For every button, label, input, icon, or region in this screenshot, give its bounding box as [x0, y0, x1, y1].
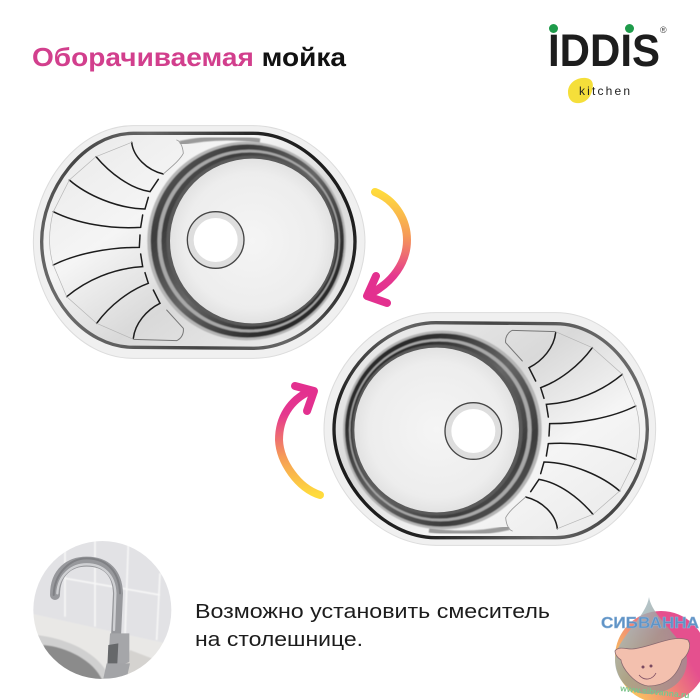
arrow: clockwise up	[279, 386, 320, 495]
watermark bath	[615, 639, 690, 686]
watermark drop	[615, 597, 687, 694]
yellow blob	[568, 78, 593, 103]
text line two: на столешнице.	[195, 629, 363, 651]
sink deck	[42, 133, 355, 348]
photo: faucet on countertop	[33, 541, 172, 679]
watermark url: www.sibvanna.ru	[619, 683, 690, 700]
bowl ring	[147, 142, 346, 340]
text line one: Возможно установить смеситель	[195, 601, 550, 623]
deck streak	[180, 138, 260, 143]
arrow: clockwise down	[367, 192, 407, 303]
faucet	[54, 558, 130, 678]
sink outer rim	[33, 126, 365, 358]
panel: sink upper	[33, 126, 365, 358]
panel: sink lower	[324, 313, 656, 545]
counter edge	[126, 650, 152, 674]
watermark: Sibvanna	[601, 597, 700, 700]
countertop	[30, 613, 173, 683]
logo: IDDIS kitchen	[548, 24, 667, 103]
watermark colour disc	[615, 611, 700, 700]
description text	[195, 601, 550, 651]
sink basin	[38, 635, 108, 679]
watermark name: СИБВАННА	[601, 615, 699, 632]
logo dots	[549, 24, 634, 33]
registered mark: ®	[660, 25, 667, 35]
bowl floor	[170, 159, 335, 323]
logo wordmark: IDDIS	[548, 25, 660, 76]
wall tiles	[33, 541, 172, 643]
drain hole	[187, 212, 244, 268]
kitchen label: kitchen	[579, 84, 630, 98]
title: Оборачиваемая мойка	[32, 42, 347, 72]
drainboard ribs	[50, 140, 183, 341]
